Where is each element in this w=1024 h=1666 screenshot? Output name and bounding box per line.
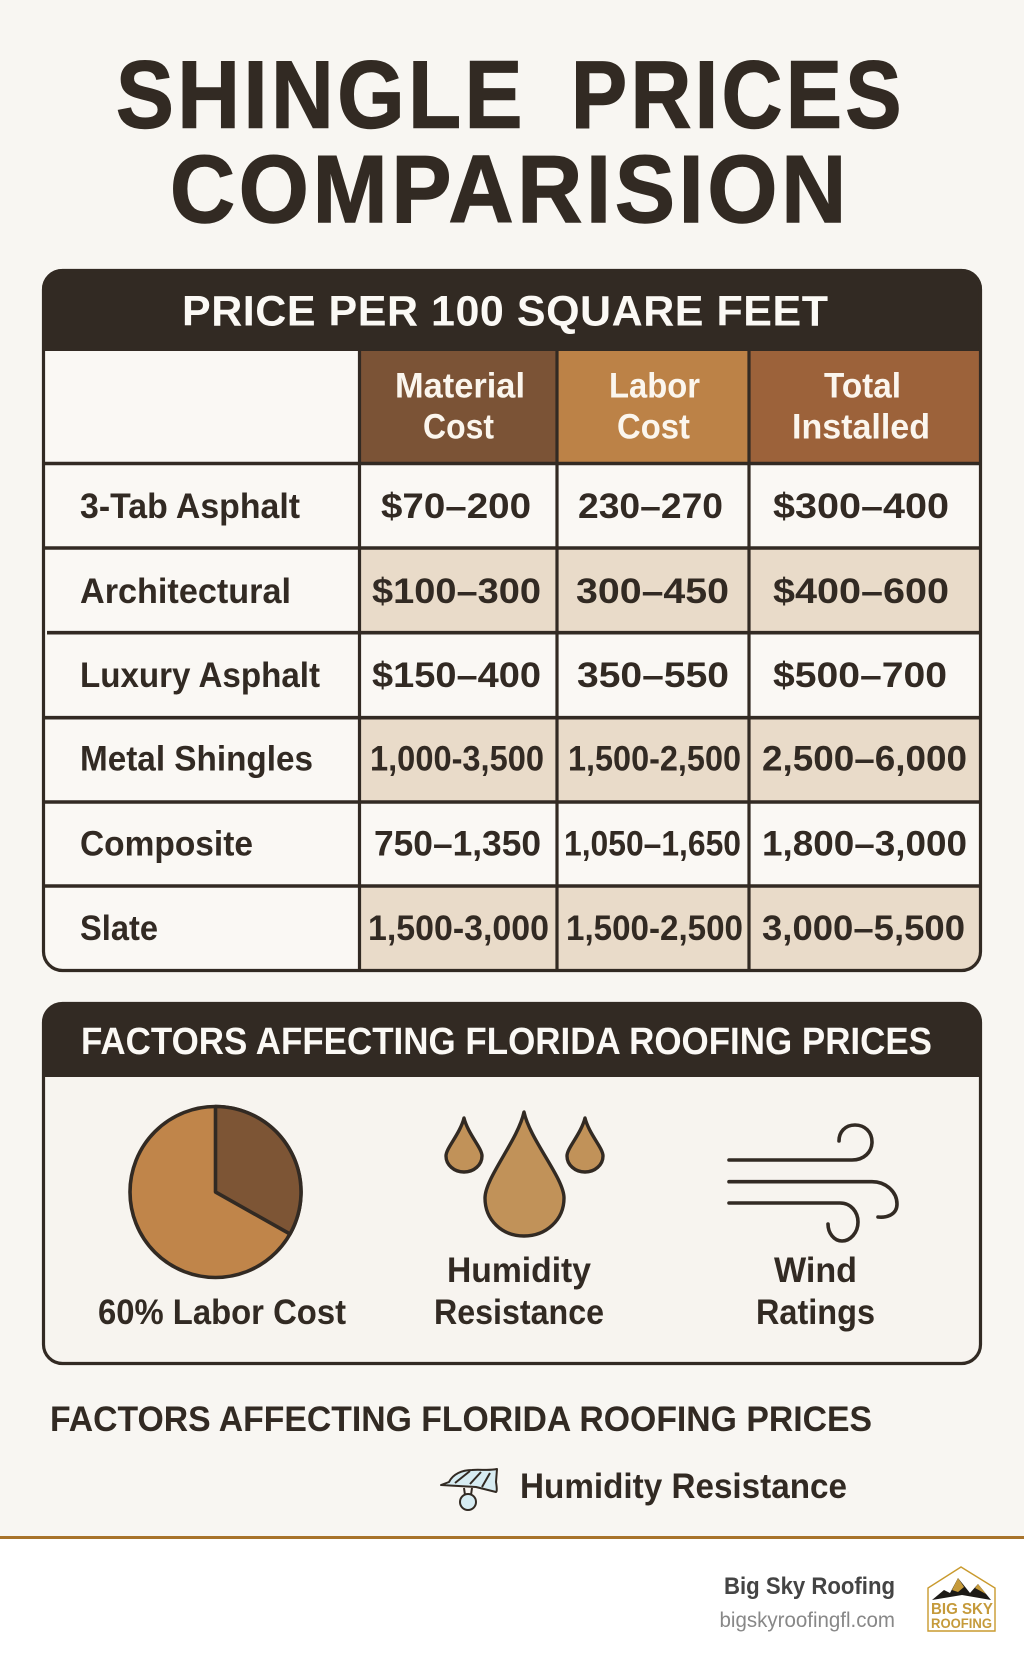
row: Composite: Composite [80, 825, 253, 864]
brand name: Big Sky Roofing [724, 1573, 895, 1600]
icon: wind [729, 1125, 897, 1241]
row: Slate: 3,000–5,500 [762, 909, 965, 948]
row: Slate: 1,500-2,500 [566, 909, 743, 948]
row: Luxury Asphalt: $150–400 [372, 656, 541, 695]
row: Architectural: $400–600 [773, 572, 949, 611]
logo [928, 1567, 995, 1631]
title [116, 42, 905, 243]
row: Luxury Asphalt [80, 656, 947, 695]
row: Luxury Asphalt: 350–550 [577, 656, 729, 695]
logo: BIG SKY [931, 1601, 993, 1618]
row: 3-Tab Asphalt: $300–400 [773, 487, 949, 526]
row: 3-Tab Asphalt: $70–200 [381, 487, 531, 526]
column header: total installed: Installed [792, 408, 930, 446]
row: Luxury Asphalt: $500–700 [773, 656, 947, 695]
title: COMPARISION [170, 136, 850, 243]
title: SHINGLE [116, 42, 526, 148]
row: Slate: Slate [80, 909, 158, 948]
column header: labor cost: Cost [617, 408, 690, 446]
label: 60% labor cost: 60% Labor Cost [98, 1293, 346, 1332]
label: humidity resistance: Resistance [434, 1293, 604, 1332]
row: Metal Shingles: Metal Shingles [80, 740, 313, 779]
row: Metal Shingles: 1,500-2,500 [568, 740, 741, 779]
column header: material cost: Cost [423, 408, 494, 446]
label: humidity resistance: Humidity [447, 1251, 592, 1290]
shaded rows [359, 548, 980, 971]
footer [0, 1536, 1024, 1666]
label: wind ratings: Ratings [756, 1293, 875, 1332]
row: 3-Tab Asphalt: 230–270 [578, 487, 723, 526]
secondary heading: FACTORS AFFECTING FLORIDA ROOFING PRICES [50, 1400, 872, 1439]
row: Composite: 750–1,350 [374, 825, 541, 864]
row: 3-Tab Asphalt: 3-Tab Asphalt [80, 487, 300, 526]
logo: ROOFING [931, 1615, 992, 1631]
website: bigskyroofingfl.com [720, 1609, 895, 1632]
row: Metal Shingles: 2,500–6,000 [762, 740, 967, 779]
factors background [44, 1004, 980, 1364]
panel: price table [42, 269, 982, 972]
column header: labor cost [557, 351, 749, 462]
row: Metal Shingles [80, 740, 967, 779]
row: Architectural [80, 572, 949, 611]
row: Metal Shingles: 1,000-3,500 [370, 740, 544, 779]
column header: material cost [359, 351, 557, 462]
row: Architectural: $100–300 [372, 572, 541, 611]
column header: labor cost: Labor [609, 366, 700, 406]
column header: material cost: Material [395, 366, 525, 406]
factors heading bar [42, 1003, 982, 1077]
label: wind ratings: Wind [774, 1251, 857, 1290]
factors heading bar: FACTORS AFFECTING FLORIDA ROOFING PRICES [81, 1021, 932, 1063]
row: Architectural: 300–450 [576, 572, 729, 611]
row: Composite: 1,800–3,000 [762, 825, 967, 864]
row: Luxury Asphalt: Luxury Asphalt [80, 656, 320, 695]
footer rule [0, 1536, 1024, 1539]
chart: labor cost pie [130, 1106, 301, 1278]
table background [42, 269, 982, 972]
column header: total installed [749, 351, 980, 462]
row: Composite: 1,050–1,650 [564, 825, 741, 864]
table grid [42, 270, 982, 972]
row: 3-Tab Asphalt [80, 487, 949, 526]
label: humidity resistance row: Humidity Resistance [520, 1467, 847, 1506]
row: Slate [80, 909, 965, 948]
label: wind ratings [756, 1251, 875, 1332]
icon: water drops [446, 1112, 603, 1236]
row: Architectural: Architectural [80, 572, 291, 611]
table heading bar [42, 269, 982, 351]
row: Slate: 1,500-3,000 [368, 909, 549, 948]
row: Composite [80, 825, 967, 864]
panel: factors [42, 1003, 982, 1364]
table heading bar: PRICE PER 100 SQUARE FEET [182, 288, 828, 336]
label: humidity resistance [434, 1251, 604, 1332]
column header: total installed: Total [824, 366, 901, 406]
footer band [0, 1539, 1024, 1666]
title: PRICES [571, 42, 905, 148]
icon: shingle with droplet [441, 1469, 497, 1510]
